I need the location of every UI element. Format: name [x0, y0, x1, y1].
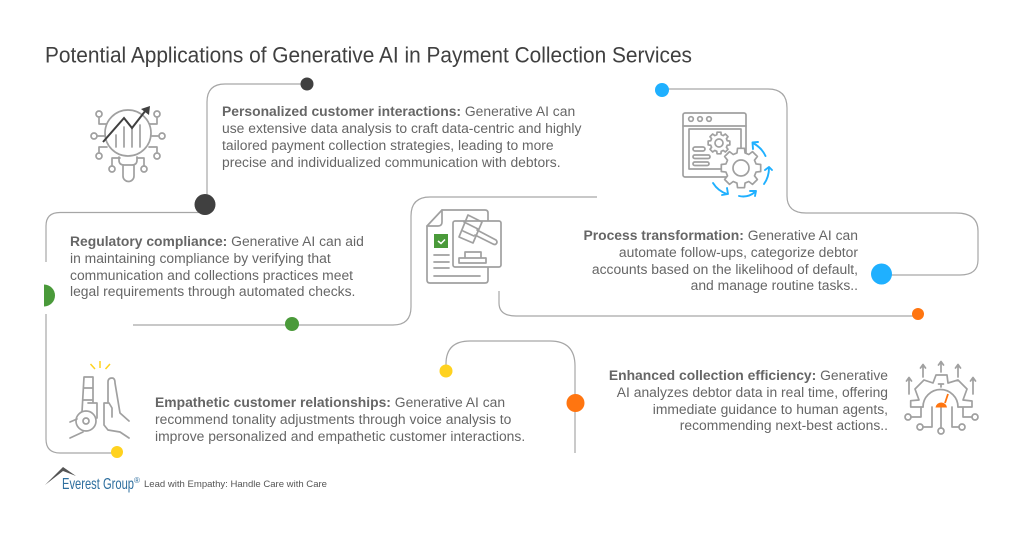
connector: personalized to regulatory path	[46, 84, 307, 453]
text block: empathetic customer relationships: recommend tonality adjustments through voice analysis to	[155, 411, 512, 427]
logo: Everest Group: ®	[134, 476, 140, 485]
text block: personalized customer interactions: precise and individualized communication with debtors.	[222, 154, 561, 170]
text block: enhanced collection efficiency: recommending next-best actions..	[680, 417, 888, 433]
dot: orange large	[566, 394, 584, 412]
logo: Everest Group	[45, 467, 140, 493]
text block: regulatory compliance: in maintaining compliance by verifying that	[70, 250, 331, 266]
text block: enhanced collection efficiency	[609, 367, 888, 433]
text block: personalized customer interactions	[222, 103, 581, 170]
text block: regulatory compliance: Regulatory compliance: Generative AI can aid	[70, 233, 364, 249]
dot: yellow lower left	[111, 446, 123, 458]
text block: enhanced collection efficiency: Enhanced collection efficiency: Generative	[609, 367, 888, 383]
icon: magnifier with rising chart	[91, 106, 165, 182]
tagline: Lead with Empathy: Handle Care with Care	[144, 479, 327, 490]
text block: empathetic customer relationships: improve personalized and empathetic customer interactions.	[155, 428, 525, 444]
text block: regulatory compliance: communication and collections practices meet	[70, 267, 353, 283]
connector: orange path	[499, 291, 918, 316]
text block: process transformation	[583, 227, 858, 293]
icon: document and gavel	[427, 210, 501, 283]
text block: personalized customer interactions: use extensive data analysis to craft data-centric and highly	[222, 120, 581, 136]
logo: Everest Group: Everest Group	[62, 476, 134, 493]
text block: personalized customer interactions: Personalized customer interactions: Generative AI can	[222, 103, 575, 119]
text block: process transformation: accounts based on the likelihood of default,	[592, 261, 858, 277]
text block: empathetic customer relationships	[155, 394, 525, 444]
text block: regulatory compliance	[70, 233, 364, 299]
text block: empathetic customer relationships: Empathetic customer relationships: Generative AI can	[155, 394, 505, 410]
dot: dark large	[194, 194, 216, 215]
text block: process transformation: Process transformation: Generative AI can	[583, 227, 858, 243]
connector: green path	[133, 197, 597, 325]
text block: personalized customer interactions: tailored payment collection strategies, leading to more	[222, 137, 554, 153]
dot: green small	[285, 317, 299, 331]
dot: blue large	[871, 264, 892, 284]
dot: yellow center	[440, 364, 452, 378]
icon: gear gauge with arrows	[905, 362, 978, 434]
text block: regulatory compliance: legal requirements through automated checks.	[70, 283, 355, 299]
dot: orange small	[912, 308, 924, 320]
dot: green half	[44, 284, 55, 306]
connector: blue path	[662, 89, 978, 275]
text block: enhanced collection efficiency: AI analyzes debtor data in real time, offering	[617, 384, 888, 400]
dot: blue small	[655, 83, 669, 97]
icon: hands with sparkles	[70, 361, 129, 438]
text block: process transformation: and manage routine tasks..	[691, 277, 858, 293]
text block: enhanced collection efficiency: immediate guidance to human agents,	[653, 401, 888, 417]
icon: browser window with gears	[683, 113, 772, 196]
dot: dark small	[300, 78, 314, 90]
text block: process transformation: automate follow-ups, categorize debtor	[619, 244, 858, 260]
title: Potential Applications of Generative AI in Payment Collection Services	[45, 42, 692, 68]
connector: yellow to orange path	[446, 341, 575, 453]
